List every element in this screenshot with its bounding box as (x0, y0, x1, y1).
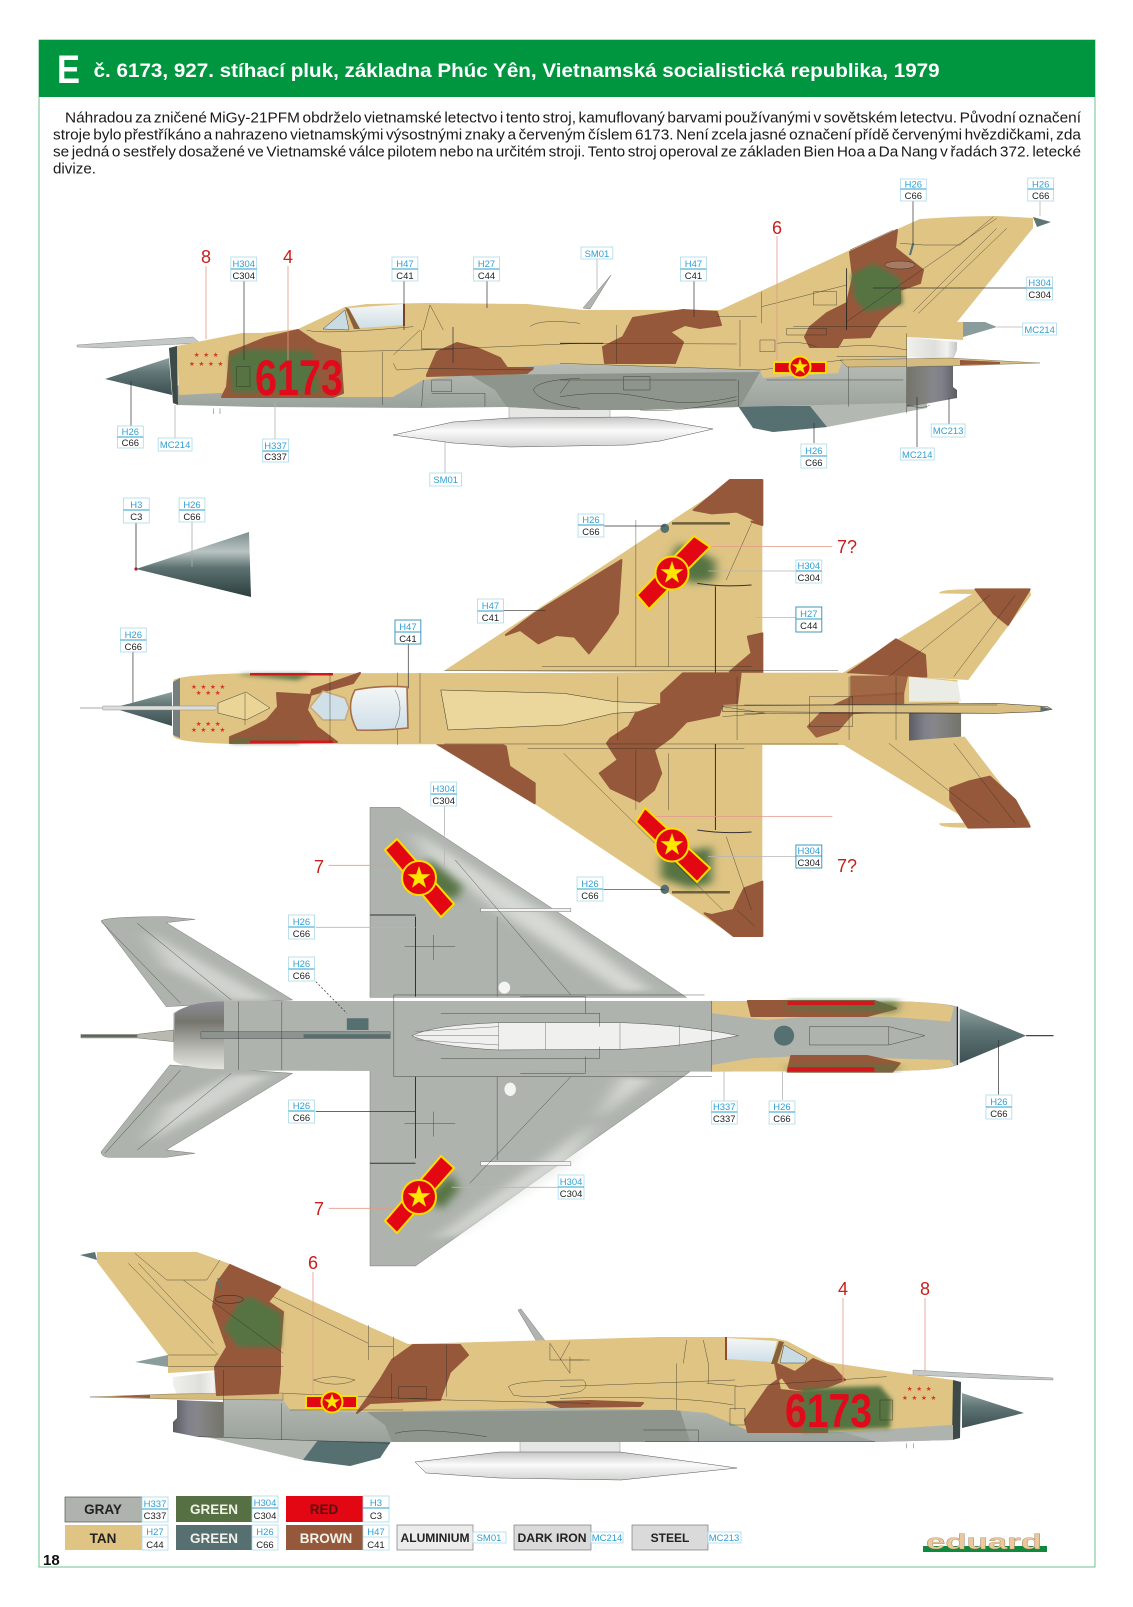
belly details (560, 217, 1007, 413)
red numbers bottom view (314, 857, 324, 1219)
camouflage nose green (802, 1386, 892, 1432)
label MC214 nose ring: MC214 (160, 440, 190, 451)
red stencil numbers upper profile: 8 (201, 247, 211, 267)
swatch STEEL: MC213 (709, 1533, 739, 1544)
red numbers bottom view: 7 (314, 857, 324, 877)
header band (39, 40, 1095, 97)
label H26 C66 nose cone: H26 (990, 1097, 1008, 1108)
insignia: top view lower wing (636, 808, 710, 882)
canopy main glass (349, 304, 403, 328)
label H26 C66 (900, 179, 926, 202)
label H337 C337 (263, 439, 289, 463)
label H304 C304 wing: H304 (560, 1177, 582, 1188)
radome (962, 1393, 1024, 1428)
red numbers lower profile: 8 (920, 1279, 930, 1299)
pylon (520, 1440, 620, 1454)
label H47 C41 wing (478, 599, 503, 624)
pitot probe (77, 337, 200, 348)
label H27 C44: C44 (478, 271, 495, 282)
red stencil numbers upper profile: 4 (283, 247, 293, 267)
insignia: left side fuselage (774, 356, 826, 378)
label H26 C66 nose cone (986, 1095, 1012, 1120)
nose kill stars lower profile (902, 1385, 940, 1402)
label H47 C41: H47 (396, 259, 414, 270)
label H304 C304 upper wing (796, 560, 822, 584)
swatch ALUMINIUM (397, 1525, 506, 1550)
label H337 C337: H337 (713, 1102, 736, 1113)
nose brown (230, 673, 360, 743)
label MC214 fairing: MC214 (1024, 325, 1055, 336)
red number fragments (250, 673, 333, 743)
label H26 C66 cone: H26 (183, 500, 201, 511)
label H304 C304 upper wing (431, 782, 457, 807)
fin tip fairing (1033, 217, 1051, 227)
nose kill stars top view: ★★★★ (191, 726, 229, 734)
nose green (230, 674, 312, 743)
label H337 C337: C337 (264, 452, 287, 463)
label H26 C66 nose cone: H26 (122, 427, 139, 438)
label H47 C41 fuselage (395, 620, 421, 645)
label H47 C41 spine: H47 (685, 259, 702, 270)
colour legend (65, 1496, 741, 1551)
aircraft: top view (133, 480, 1052, 936)
tan upper fuselage and fin (97, 1252, 953, 1432)
label H304 C304 fin: H304 (1028, 278, 1051, 289)
stabilizer (90, 1393, 283, 1400)
swatch GREEN H26: C66 (256, 1540, 274, 1551)
swatch TAN (65, 1525, 168, 1551)
label H26 C66 ventral fin: C66 (805, 458, 822, 469)
pitot probe (80, 706, 218, 710)
fin root fairing (963, 322, 997, 337)
description text: Náhradou za zničené MiGy-21PFM obdrželo vietnamské letectvo i tento stroj, kamuflovaný barvami používanými v sovětském letectvu. Původní označení (65, 110, 1081, 126)
label H304 C304 fin: C304 (1028, 290, 1051, 301)
fin tip fairing (80, 1252, 97, 1260)
swatch TAN: TAN (90, 1531, 116, 1546)
canopy windscreen (323, 310, 349, 330)
label H304 C304 nose: C304 (232, 271, 255, 282)
swatch DARK IRON (514, 1525, 623, 1550)
label SM01 antenna (581, 247, 613, 260)
aircraft: left side view (77, 201, 1051, 473)
label H26 C66 wing tip: H26 (582, 515, 600, 526)
label H26 C66 nose (120, 628, 146, 653)
exhaust (907, 337, 957, 360)
description text: divize. (53, 162, 96, 178)
lower fuselage gray (172, 355, 907, 410)
label H26 C66 belly (769, 1101, 795, 1125)
jet nozzle (907, 365, 957, 407)
radome (105, 358, 172, 395)
swatch BROWN: H47 (367, 1527, 385, 1538)
nose kill stars upper profile (189, 351, 227, 368)
label H26 C66 nose cone: C66 (990, 1109, 1008, 1120)
swatch DARK IRON: DARK IRON (518, 1531, 586, 1545)
aircraft: right side view (80, 1252, 1053, 1480)
nose kill stars lower profile: ★★★ (907, 1385, 935, 1393)
label H26 C66 ventral fin (801, 444, 827, 469)
nose kill stars upper profile: ★★★★ (189, 360, 227, 368)
insignia: bottom view upper wing (385, 839, 454, 917)
label H26 C66 belly: C66 (773, 1114, 791, 1125)
canopy windscreen (780, 1345, 807, 1363)
swatch GRAY (65, 1497, 168, 1522)
swatch ALUMINIUM: ALUMINIUM (400, 1531, 470, 1545)
label H47 C41 wing: H47 (482, 601, 499, 612)
label H47 C41 fuselage: C41 (399, 634, 417, 645)
lower fuselage gray (198, 1385, 953, 1442)
radome (113, 692, 172, 726)
swatch GREEN H304: GREEN (190, 1502, 238, 1517)
label H26 C66 lower: H26 (293, 1101, 310, 1112)
camouflage fin green (224, 1296, 282, 1347)
insignia: top view upper wing (637, 536, 710, 609)
camouflage patch forward (427, 343, 533, 376)
label H26 C66: C66 (293, 929, 310, 940)
nose kill stars top view (191, 683, 229, 734)
nose and canopy: top view (80, 673, 420, 743)
logo: eduard (923, 1531, 1047, 1554)
title: č. 6173, 927. stíhací pluk, základna Phúc Yên, Vietnamská socialistická republika, 1979 (94, 61, 940, 82)
serial number 6173 upper profile: 6173 (255, 350, 343, 406)
swatch ALUMINIUM: SM01 (477, 1533, 501, 1544)
label H26 C66 nose cone (117, 426, 143, 449)
label H26 C66 lower (289, 1100, 314, 1124)
swatch GREEN H304: H304 (254, 1498, 276, 1509)
forward canopy (310, 691, 349, 720)
camouflage patch centre (603, 310, 721, 363)
swatch STEEL: STEEL (651, 1531, 689, 1545)
label H26 C66 lower: C66 (293, 1113, 310, 1124)
label SM01 tank (430, 473, 462, 486)
label H27 C44 wing (796, 607, 822, 632)
label H337 C337: H337 (264, 441, 287, 452)
camouflage fin brown (805, 230, 923, 347)
fin root fairing (135, 1355, 168, 1367)
exhaust (173, 1371, 223, 1395)
label H3 C3: H3 (130, 500, 142, 511)
camouflage nose green (229, 349, 320, 393)
callout labels: bottom view (289, 782, 1012, 1200)
label H26 C66: H26 (905, 179, 922, 191)
label H27 C44 wing: H27 (800, 609, 818, 620)
label H304 C304 lower wing: C304 (798, 858, 820, 869)
label H26 C66 lower tip (577, 877, 603, 902)
swatch RED: RED (310, 1502, 338, 1517)
swatch RED: H3 (370, 1498, 382, 1509)
label H304 C304 fin (1027, 277, 1053, 301)
swatch GREEN H26: H26 (256, 1527, 274, 1538)
nose kill stars top view: ★★★ (196, 720, 224, 728)
label H26 C66: H26 (293, 917, 310, 928)
label H47 C41 spine: C41 (685, 271, 702, 282)
details (128, 1253, 590, 1443)
swatch GREEN H26 (176, 1525, 278, 1551)
label H26 C66 (289, 915, 314, 940)
canopy main glass (727, 1338, 777, 1362)
swatch TAN: C44 (146, 1540, 164, 1551)
swatch GRAY: H337 (144, 1499, 166, 1510)
swatch GREEN H304: C304 (254, 1511, 276, 1522)
label H3 C3 (123, 498, 149, 523)
nose kill stars top view: ★★★★ (191, 683, 229, 691)
label H47 C41 wing: C41 (482, 613, 499, 624)
label H304 C304 nose: H304 (232, 259, 255, 270)
label H26 C66 nose: C66 (125, 642, 142, 653)
label H26 C66 wing tip (578, 514, 604, 538)
pitot probe (913, 1370, 1053, 1380)
red numbers lower profile: 4 (838, 1279, 848, 1299)
main canopy (350, 686, 408, 730)
camouflage low strip (547, 1401, 643, 1407)
label H47 C41 (392, 257, 418, 282)
label H47 C41 fuselage: H47 (399, 622, 417, 633)
swatch BROWN (286, 1525, 389, 1551)
red numbers top view: 7? (837, 537, 857, 557)
label H337 C337 (711, 1101, 737, 1125)
label H26 C66 ventral fin: H26 (805, 446, 822, 457)
aircraft: bottom view (81, 800, 1054, 1266)
leaders (131, 201, 1027, 447)
label H26 C66 dashed: C66 (293, 971, 310, 982)
swatch RED (286, 1496, 389, 1522)
antenna (518, 1309, 546, 1342)
label H26 C66 wing tip: C66 (582, 527, 600, 538)
nose kill stars upper profile: ★★★ (194, 351, 222, 359)
label H304 C304 upper wing: H304 (798, 561, 820, 572)
label H304 C304 wing (558, 1175, 584, 1200)
label H304 C304 upper wing: H304 (432, 784, 455, 795)
swatch GRAY: C337 (144, 1511, 166, 1522)
label H26 C66 dashed: H26 (293, 959, 310, 970)
description text: se jedná o sestřely dosažené ve Vietnamské válce pilotem nebo na určitém stroji. Tento stroj operoval ze základen Bien Hoa a Da Nang v řadách 372. letecké (53, 144, 1081, 160)
label H337 C337: C337 (713, 1114, 736, 1125)
red stencil numbers upper profile: 6 (772, 218, 782, 238)
label H27 C44 wing: C44 (800, 621, 818, 632)
label H27 C44 (474, 257, 499, 282)
label H26 C66 nose cone: C66 (122, 438, 139, 449)
scheme letter: E (57, 48, 80, 92)
camouflage fin green (851, 263, 903, 312)
drop tank (415, 1452, 737, 1480)
drop tank: side view (393, 417, 713, 447)
label H26 C66 fin tip: H26 (1032, 179, 1049, 191)
swatch TAN: H27 (146, 1527, 164, 1538)
swatch GREEN H26: GREEN (190, 1531, 238, 1546)
label H26 C66 fin tip (1028, 178, 1054, 202)
label H304 C304 upper wing: C304 (432, 796, 455, 807)
label H26 C66 cone: C66 (183, 512, 201, 523)
label H26 C66 lower tip: C66 (581, 891, 599, 902)
label H26 C66 nose: H26 (125, 630, 142, 641)
red numbers top view (837, 537, 857, 876)
label H26 C66 belly: H26 (773, 1102, 791, 1113)
label MC214: MC214 (902, 450, 933, 461)
logo: eduard: eduard (926, 1531, 1042, 1554)
label H304 C304 upper wing: C304 (798, 573, 820, 584)
swatch BROWN: C41 (367, 1540, 385, 1551)
tan upper fuselage and fin (177, 216, 1033, 397)
red numbers lower profile: 6 (308, 1253, 318, 1273)
label H26 C66 cone (179, 498, 205, 523)
page number: 18 (43, 1552, 60, 1569)
label SM01 antenna: SM01 (585, 249, 609, 260)
label H26 C66 lower tip: H26 (581, 879, 599, 890)
swatch BROWN: BROWN (300, 1531, 352, 1546)
nose cone detail (123, 498, 251, 597)
camouflage nose brown (222, 330, 343, 397)
label H26 C66 dashed (289, 957, 314, 982)
callout labels: side view (117, 178, 1057, 486)
label H304 C304 nose (231, 257, 257, 282)
leaders (313, 1272, 925, 1396)
insignia: right side fuselage (306, 1392, 357, 1412)
nose cone panel (218, 692, 270, 720)
label SM01 tank: SM01 (433, 475, 458, 486)
swatch STEEL (632, 1525, 741, 1550)
label H304 C304 lower wing (796, 845, 822, 869)
description text: stroje bylo přestříkáno a nahrazeno vietnamskými výsostnými znaky a červeným číslem 6173. Není zcela jasné označení přídě červenými hvězdičkami, zda (53, 128, 1082, 144)
red numbers top view: 7? (837, 856, 857, 876)
label H304 C304 wing: C304 (560, 1189, 582, 1200)
red numbers lower profile (308, 1253, 930, 1299)
jet nozzle (173, 1400, 223, 1437)
antenna (583, 275, 611, 309)
swatch RED: C3 (370, 1511, 382, 1522)
red numbers bottom view: 7 (314, 1199, 324, 1219)
camouflage nose brown (745, 1359, 845, 1432)
ventral fin (738, 400, 927, 432)
ventral fin (198, 1435, 392, 1466)
camouflage fin brown (213, 1265, 283, 1395)
label H26 C66 fin tip: C66 (1032, 191, 1049, 202)
description text (53, 110, 1082, 178)
label H3 C3: C3 (130, 512, 142, 523)
label H26 C66: C66 (905, 191, 922, 202)
pylon (509, 405, 610, 420)
label MC213: MC213 (933, 426, 963, 437)
nose kill stars lower profile: ★★★★ (902, 1394, 940, 1402)
stabilizer (840, 358, 1040, 367)
label H47 C41: C41 (396, 271, 414, 282)
label H304 C304 lower wing: H304 (798, 846, 820, 857)
swatch GRAY: GRAY (84, 1502, 122, 1517)
label H27 C44: H27 (478, 259, 495, 270)
insignia: bottom view lower wing (385, 1156, 454, 1233)
swatch DARK IRON: MC214 (592, 1533, 622, 1544)
swatch GREEN H304 (176, 1496, 278, 1522)
serial number 6173 lower profile: 6173 (785, 1384, 872, 1437)
label H47 C41 spine (681, 257, 706, 282)
red stencil numbers upper profile (201, 218, 782, 267)
camouflage centre (357, 1345, 468, 1413)
nose kill stars top view: ★★★ (196, 689, 224, 697)
callout labels: top view (120, 514, 822, 902)
